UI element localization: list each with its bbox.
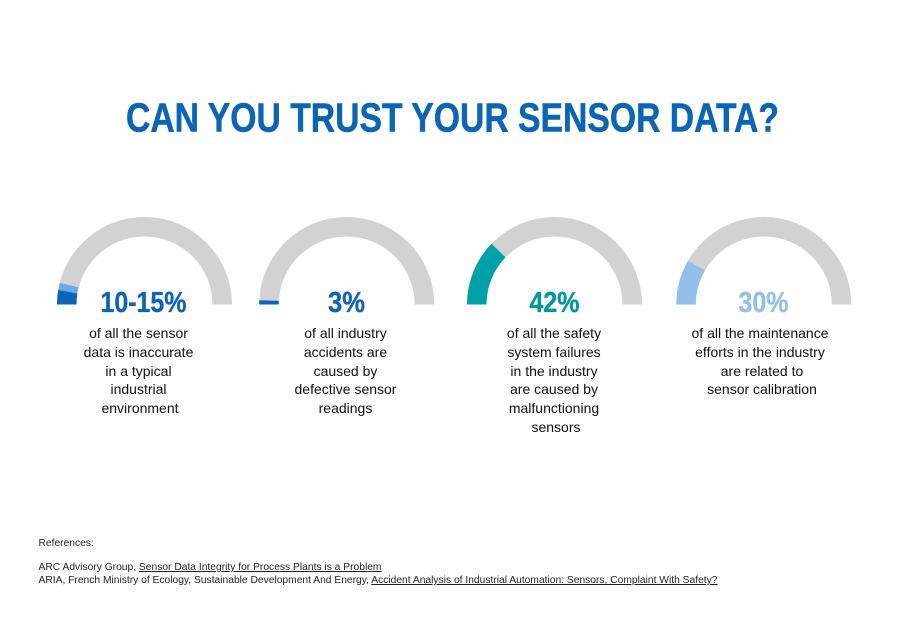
description: malfunctioning bbox=[509, 400, 599, 416]
panel: 10-15% inaccurate data bbox=[57, 217, 232, 416]
percentage: 30%: 30% bbox=[738, 287, 789, 319]
description: readings bbox=[319, 400, 372, 416]
panel: 42% safety system failures bbox=[467, 217, 642, 435]
percentage: 10-15%: 10-15% bbox=[100, 287, 187, 319]
description: defective sensor bbox=[295, 381, 397, 397]
description: caused by bbox=[314, 363, 377, 379]
description: sensor calibration bbox=[707, 381, 817, 397]
description: of all the safety bbox=[507, 325, 601, 341]
description: are related to bbox=[721, 363, 803, 379]
description: of all industry bbox=[304, 325, 387, 341]
references: ARC Advisory Group, Sensor Data Integrity for Process Plants is a Problem bbox=[38, 562, 382, 573]
description: efforts in the industry bbox=[695, 344, 825, 360]
description: of all the sensor bbox=[89, 325, 188, 341]
references bbox=[38, 538, 718, 586]
panel: 3% industry accidents bbox=[259, 217, 434, 416]
description: in a typical bbox=[105, 363, 172, 379]
gauge: 42% bbox=[467, 217, 642, 304]
references: References: bbox=[38, 538, 94, 549]
title: CAN YOU TRUST YOUR SENSOR DATA? bbox=[126, 94, 779, 140]
description: accidents are bbox=[304, 344, 387, 360]
percentage: 3%: 3% bbox=[328, 287, 365, 319]
gauge: 30% bbox=[676, 217, 851, 304]
description: sensors bbox=[531, 419, 581, 435]
description: of all the maintenance bbox=[692, 325, 829, 341]
percentage: 42%: 42% bbox=[530, 287, 580, 319]
panel: 30% maintenance efforts bbox=[676, 217, 851, 397]
description: are caused by bbox=[510, 381, 598, 397]
description: industrial bbox=[110, 381, 167, 397]
gauge: 3% bbox=[259, 217, 434, 304]
description: data is inaccurate bbox=[84, 344, 194, 360]
description: in the industry bbox=[510, 363, 598, 379]
gauge: 10-15% bbox=[57, 217, 232, 304]
description: system failures bbox=[507, 344, 601, 360]
description: environment bbox=[101, 400, 179, 416]
references: ARIA, French Ministry of Ecology, Sustainable Development And Energy, Accident Analysis of Industrial Automation: Sensors, Complaint With Safety? bbox=[38, 575, 718, 586]
